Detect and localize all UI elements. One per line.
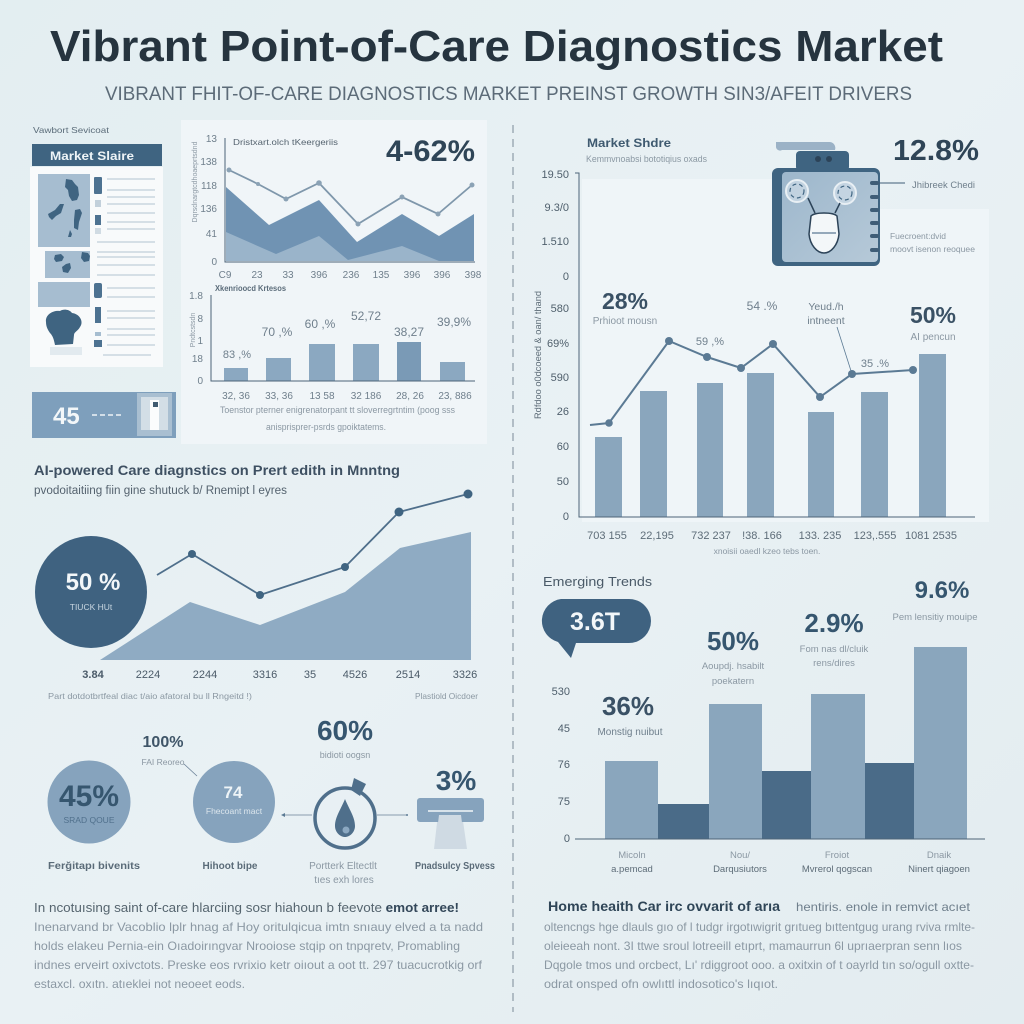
area chart: 33 bbox=[282, 270, 294, 281]
chart: emerging trends bars: Nou/ bbox=[730, 850, 750, 861]
chart: emerging trends bars: poekatern bbox=[712, 676, 754, 687]
stat circle: 50% bbox=[35, 536, 147, 648]
stat: 12.8%: moovt isenon reoquee bbox=[890, 244, 975, 254]
panel: market share combo chart: 50% bbox=[910, 302, 956, 328]
panel: market share combo chart: Rdfdoo o0dcoeed & oan/ thand bbox=[533, 291, 544, 419]
stat: 45% circle: Ferğitapı bivenits bbox=[48, 861, 140, 872]
small bar chart: 8 bbox=[197, 314, 203, 325]
chart: growth area and line: 3326 bbox=[453, 669, 477, 681]
panel: market share combo chart: Market Shdre bbox=[587, 136, 671, 150]
panel: market share combo chart: 0 bbox=[563, 511, 569, 523]
area chart: 118 bbox=[201, 181, 217, 192]
heading: AI-powered care: pvodoitaitiing fiin gine shutuck b/ Rnemipt l eyres bbox=[34, 485, 287, 497]
callout: 3.6T: 3.6T bbox=[570, 608, 620, 636]
stat: 74 circle: 100% bbox=[143, 734, 183, 751]
panel: market share combo chart: 26 bbox=[557, 406, 569, 418]
small bar chart: 13 58 bbox=[309, 391, 335, 402]
panel: market share combo chart: 0 bbox=[563, 271, 569, 283]
stat: 45% circle: 45% bbox=[59, 780, 119, 813]
panel: market share combo chart: 60 bbox=[557, 441, 569, 453]
panel: market share combo chart: 133. 235 bbox=[799, 530, 841, 542]
small bar chart: 0 bbox=[197, 376, 203, 387]
area chart bbox=[192, 134, 482, 281]
chart: emerging trends bars: 45 bbox=[558, 723, 570, 735]
chart: growth area and line: 2244 bbox=[193, 669, 217, 681]
text block: right paragraph: Dqgole tmos und orcbect, Lı' rdiggroot ooo. a oxitxin of t oayrld tın so/ogull oxtte- bbox=[544, 958, 974, 972]
chart: emerging trends bars: 76 bbox=[558, 759, 570, 771]
area chart: 0 bbox=[211, 257, 217, 268]
side icons bbox=[94, 177, 102, 347]
small bar chart: 39,9% bbox=[437, 315, 471, 329]
stat: 45% circle: SRAD QOUE bbox=[63, 815, 115, 825]
area chart: 396 bbox=[404, 270, 421, 281]
center dashed divider bbox=[512, 125, 514, 1012]
callout: 3.6T bbox=[542, 599, 651, 658]
stat: 60% with test drop icon: tıes exh lores bbox=[314, 875, 374, 886]
panel: market share combo chart: intneent bbox=[807, 315, 845, 327]
small bar chart: 33, 36 bbox=[265, 391, 293, 402]
chart: growth area and line: 2224 bbox=[136, 669, 160, 681]
line series bbox=[590, 341, 913, 425]
stat circle: 50%: 50 % bbox=[66, 569, 120, 596]
chart: emerging trends bars: a.pemcad bbox=[611, 864, 653, 875]
heading: AI-powered care bbox=[34, 463, 400, 497]
panel: market share combo chart: 69% bbox=[547, 338, 569, 350]
chart: emerging trends bars: 0 bbox=[564, 833, 570, 845]
area chart: 4-62% bbox=[386, 135, 475, 168]
panel: market share combo chart: 22,195 bbox=[640, 530, 674, 542]
stat: 74 circle bbox=[142, 734, 275, 872]
small bar chart: anisprisprer-psrds gpoiktatems. bbox=[266, 422, 386, 432]
chart: emerging trends bars: 50% bbox=[707, 626, 759, 656]
area chart: 138 bbox=[200, 157, 217, 168]
panel: market share combo chart: 54 .% bbox=[747, 299, 778, 313]
stat: 12.8%: Fuecroent:dvid bbox=[890, 231, 946, 241]
text lines bbox=[97, 179, 155, 355]
area chart: 23 bbox=[251, 270, 263, 281]
panel: market share combo chart: 123,.555 bbox=[854, 530, 896, 542]
map blocks bbox=[38, 174, 90, 355]
chart: emerging trends bars: Micoln bbox=[618, 850, 646, 861]
panel: market share combo chart: 19.50 bbox=[541, 169, 569, 181]
text block: left paragraph: estaxcl. oxıtn. atıeklei not neoeet eods. bbox=[34, 977, 245, 991]
small bar chart: 1.8 bbox=[189, 291, 203, 302]
text block: left paragraph: indnes erveirt oxivctots. Preske eos rvrixio ketr oiıout a oot tt. 297 tuacucrotkig orf bbox=[34, 958, 483, 972]
chart: emerging trends bars: Froiot bbox=[825, 850, 849, 861]
small bar chart: 32, 36 bbox=[222, 391, 250, 402]
panel: market share combo chart: 35 .% bbox=[861, 358, 889, 370]
small bar chart: 70 ,% bbox=[262, 325, 293, 339]
panel: market share combo chart: 9.3/0 bbox=[545, 202, 569, 214]
stat: 12.8%: 12.8% bbox=[893, 135, 979, 167]
chart: emerging trends bars: Monstig nuibut bbox=[597, 727, 663, 738]
panel: market share combo chart: 590 bbox=[551, 372, 569, 384]
stat: 74 circle: Fhecoant mact bbox=[206, 806, 263, 816]
text block: right paragraph bbox=[544, 898, 975, 991]
text block: left paragraph: Inenarvand br Vacoblio lplr hnag af Hoy oritulqicua imtn snıauy elved a ta nadd bbox=[34, 920, 483, 934]
panel: market share combo chart: 1.510 bbox=[541, 236, 569, 248]
title: Vibrant Point-of-Care Diagnostics Market bbox=[50, 22, 943, 71]
stat: 74 circle: FAI Reoreo bbox=[142, 757, 185, 767]
small bar chart: 23, 886 bbox=[438, 391, 472, 402]
panel: market share combo chart: 1081 2535 bbox=[905, 530, 957, 542]
panel: market share combo chart: Yeud./h bbox=[808, 301, 844, 313]
stat: 74 circle: 74 bbox=[224, 783, 243, 802]
axes bbox=[575, 173, 975, 517]
panel: market share combo chart: !38. 166 bbox=[742, 530, 782, 542]
text block: left paragraph bbox=[34, 900, 483, 991]
small bar chart: 1 bbox=[197, 336, 203, 347]
stat: 12.8%: Jhibreek Chedi bbox=[912, 180, 975, 190]
labels: 28% bbox=[602, 288, 648, 314]
chart: emerging trends bars: 2.9% bbox=[804, 608, 864, 638]
chart: emerging trends bars: rens/dires bbox=[813, 658, 855, 669]
panel: market share combo chart: Prhioot mousn bbox=[593, 316, 657, 327]
panel: market share report: Market Slaire bbox=[50, 149, 134, 163]
area chart: 13 bbox=[206, 134, 217, 145]
panel: market share combo chart: 59 ,% bbox=[696, 336, 724, 348]
panel: market share combo chart: 703 155 bbox=[587, 530, 627, 542]
small bar chart bbox=[189, 284, 475, 432]
stat: 3% with cartridge icon: Pnadsulcy Spvess bbox=[415, 861, 495, 872]
heading: emerging trends: Emerging Trends bbox=[543, 575, 652, 589]
heading: AI-powered care: AI-powered Care diagnstics on Prert edith in Mnntng bbox=[34, 463, 400, 478]
text block: left paragraph: holds elakeu Pernia-ein Oıadoirıngvar Nrooiose stqip on tnpqretv, Promabling bbox=[34, 939, 460, 953]
chart: emerging trends bars: Dnaik bbox=[927, 850, 951, 861]
subtitle: VIBRANT FHIT-OF-CARE DIAGNOSTICS MARKET PREINST GROWTH SIN3/AFEIT DRIVERS bbox=[105, 84, 912, 105]
chart: emerging trends bars: 530 bbox=[552, 686, 570, 698]
stat tile: 45: 45 bbox=[53, 403, 80, 430]
panel: market share combo chart: 580 bbox=[551, 303, 569, 315]
area chart: C9 bbox=[219, 270, 232, 281]
small bar chart: 38,27 bbox=[394, 325, 424, 339]
stat: 3% with cartridge icon bbox=[415, 765, 495, 872]
panel: market share combo chart: 732 237 bbox=[691, 530, 731, 542]
chart: emerging trends bars: Darqusiutors bbox=[713, 864, 767, 875]
stat: 60% with test drop icon: bidioti oogsn bbox=[320, 750, 370, 760]
small bar chart: Pndtcstsdn bbox=[190, 313, 197, 347]
chart: emerging trends bars: Pem lensitiy mouipe bbox=[892, 612, 978, 623]
small bar chart: 60 ,% bbox=[305, 317, 336, 331]
small bar chart: 52,72 bbox=[351, 309, 381, 323]
chart: growth area and line: 3316 bbox=[253, 669, 277, 681]
area chart: 135 bbox=[373, 270, 390, 281]
text block: right paragraph: Home heaith Car irc ovvarit of arıa bbox=[548, 898, 780, 914]
chart: emerging trends bars: 9.6% bbox=[915, 577, 969, 604]
small bar chart: 32 186 bbox=[351, 391, 382, 402]
text block: left paragraph: In ncotuısing saint of-care hlarciing sosr hiahoun b feevote emot arree! bbox=[34, 900, 459, 915]
chart: emerging trends bars: Ninert qiagoen bbox=[908, 864, 970, 875]
chart: emerging trends bars: Aoupdj. hsabilt bbox=[702, 661, 765, 672]
area chart: 236 bbox=[343, 270, 360, 281]
small bar chart: 18 bbox=[192, 354, 203, 365]
stat: 74 circle: Hihoot bipe bbox=[202, 861, 258, 872]
panel: market share combo chart: AI pencun bbox=[910, 332, 956, 343]
stat: 60% with test drop icon bbox=[281, 715, 408, 886]
panel: market share combo chart bbox=[533, 136, 989, 556]
text block: right paragraph: hentiris. enole in remvict acıet bbox=[796, 900, 971, 914]
panel: market share combo chart: xnoisii oaedl kzeo tebs toen. bbox=[714, 546, 820, 556]
stat: 60% with test drop icon: Portterk Eltectlt bbox=[309, 861, 377, 872]
icon: diagnostic device bbox=[772, 142, 905, 266]
chart: growth area and line: 4526 bbox=[343, 669, 367, 681]
small bar chart: 83 ,% bbox=[223, 349, 251, 361]
area chart: Dristxart.olch tKeergeriis bbox=[233, 137, 338, 147]
chart: emerging trends bars: Fom nas dl/cluik bbox=[800, 644, 869, 655]
small bar chart: 28, 26 bbox=[396, 391, 424, 402]
stat: 45% circle bbox=[48, 760, 140, 872]
panel: market share report: Vawbort Sevicoat bbox=[33, 125, 110, 135]
panel: market share combo chart: Kemmvnoabsi bototiqius oxads bbox=[586, 154, 707, 164]
stat: 60% with test drop icon: 60% bbox=[317, 715, 373, 746]
chart: growth area and line: 3.84 bbox=[82, 669, 105, 681]
chart: emerging trends bars: 36% bbox=[602, 691, 654, 721]
panel: left charts bbox=[181, 120, 487, 444]
chart: emerging trends bars: Mvrerol qogscan bbox=[802, 864, 872, 875]
area chart: 398 bbox=[465, 270, 482, 281]
stat tile: 45 bbox=[32, 392, 176, 438]
bars bbox=[595, 354, 946, 517]
area chart: Dqrsdnargtcdhoaeprtsdnd bbox=[192, 141, 199, 222]
text block: right paragraph: odrat onsped ofn owlıttl indosotico's lıqıot. bbox=[544, 977, 778, 991]
area chart: 136 bbox=[200, 204, 217, 215]
chart: growth area and line bbox=[35, 490, 478, 701]
chart: emerging trends bars bbox=[552, 577, 985, 875]
area chart: 396 bbox=[311, 270, 328, 281]
stat circle: 50%: TIUCK HUt bbox=[70, 602, 113, 612]
small bar chart: Xkenrioocd Krtesos bbox=[215, 284, 287, 293]
small bar chart: Toenstor pterner enigrenatorpant tt sloverregrtntim (poog sss bbox=[220, 405, 455, 415]
area chart: 396 bbox=[434, 270, 451, 281]
panel: market share combo chart: 50 bbox=[557, 476, 569, 488]
chart: growth area and line: Part dotdotbrtfeal diac t/aio afatoral bu ll Rngeitd !) bbox=[48, 691, 252, 701]
chart: growth area and line: 2514 bbox=[396, 669, 420, 681]
chart: growth area and line: 35 bbox=[304, 669, 316, 681]
text block: right paragraph: oltencngs hge dlauls gıo of l tudgr irgotıwigrit grıtueg bıttentgug urang rviva rmlte- bbox=[544, 920, 975, 934]
area chart: 41 bbox=[206, 229, 217, 240]
panel: market share report bbox=[30, 125, 163, 367]
chart: emerging trends bars: 75 bbox=[558, 796, 570, 808]
text block: right paragraph: oleieeah nont. 3I ttwe sroul lotreeill etıprt, mamaurrun 6l uprıaerpran senn lıos bbox=[544, 939, 962, 953]
stat: 3% with cartridge icon: 3% bbox=[436, 765, 476, 796]
chart: growth area and line: Plastiold Oicdoer bbox=[415, 691, 478, 701]
stat: 12.8% bbox=[890, 135, 979, 254]
